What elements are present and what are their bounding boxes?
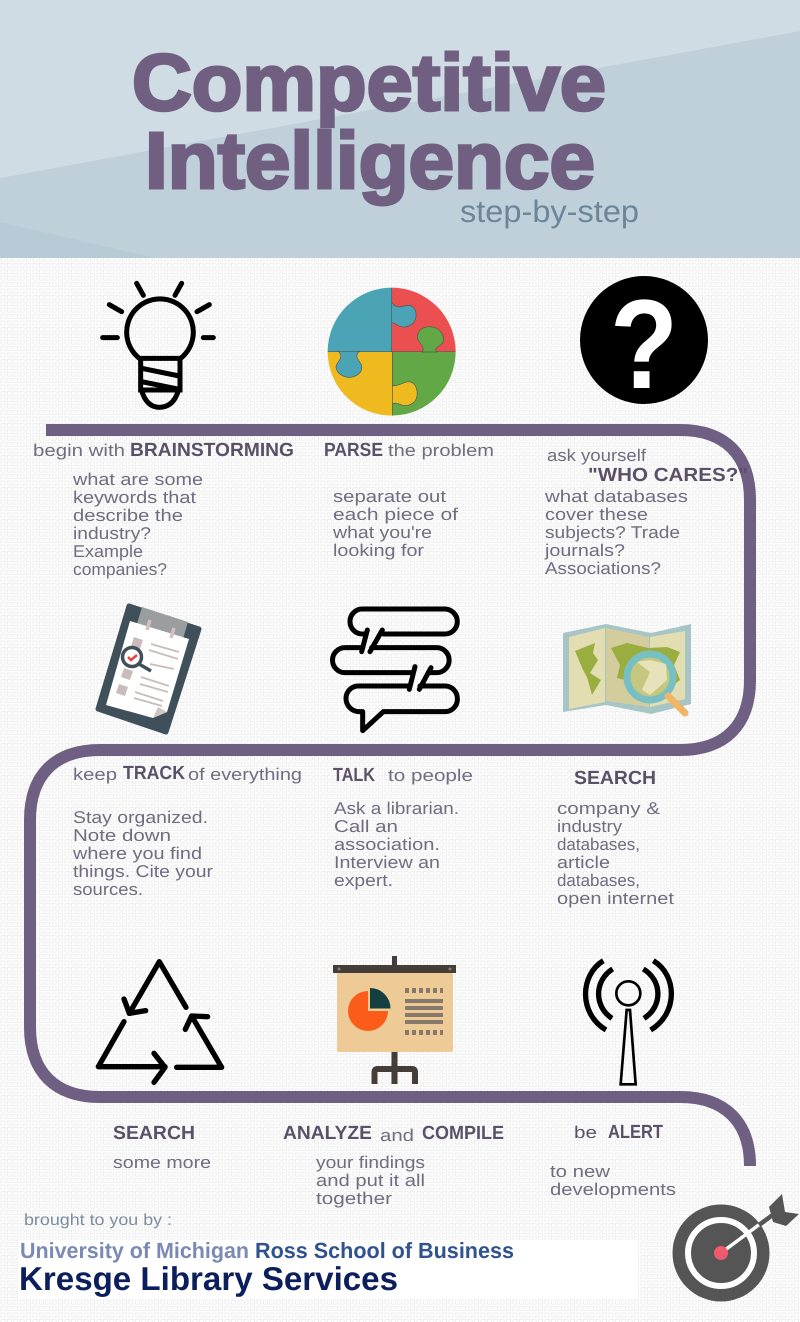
step: who cares: cover these bbox=[545, 505, 648, 524]
step: search some more: some more bbox=[113, 1153, 211, 1172]
step: search: company & bbox=[557, 799, 661, 818]
step: analyze and compile: ANALYZE bbox=[283, 1123, 372, 1144]
step: who cares bbox=[544, 446, 748, 578]
step: be alert: developments bbox=[550, 1180, 676, 1199]
step: track: Stay organized. bbox=[73, 808, 208, 827]
step: analyze and compile: COMPILE bbox=[422, 1123, 504, 1144]
step: brainstorming: industry? bbox=[73, 524, 151, 543]
step: brainstorming: keywords that bbox=[73, 488, 196, 507]
icon: clipboard bbox=[98, 606, 199, 732]
step: parse: the problem bbox=[388, 441, 494, 460]
step: search: article bbox=[557, 853, 610, 872]
icon: speech bubbles bbox=[332, 609, 457, 731]
step: track: keep bbox=[73, 765, 117, 784]
title bbox=[132, 38, 606, 205]
step: search: industry bbox=[557, 817, 623, 836]
step: track: where you find bbox=[72, 844, 202, 863]
step: analyze and compile: together bbox=[316, 1189, 392, 1208]
icon: recycle triangle bbox=[98, 962, 222, 1082]
step: search: SEARCH bbox=[574, 768, 656, 789]
logo block: University of Michigan bbox=[20, 1238, 249, 1263]
step: search bbox=[557, 768, 674, 908]
title: Competitive bbox=[132, 38, 606, 127]
step: analyze and compile: your findings bbox=[316, 1153, 425, 1172]
step: brainstorming: begin with bbox=[33, 441, 125, 460]
step: analyze and compile: and put it all bbox=[316, 1171, 425, 1190]
step: track: TRACK bbox=[123, 763, 185, 784]
step: talk: association. bbox=[334, 835, 440, 854]
step: track bbox=[72, 763, 302, 899]
icon: map with magnifier bbox=[563, 624, 691, 714]
icon: question mark bbox=[580, 273, 708, 415]
icon: antenna bbox=[586, 961, 671, 1084]
step: brainstorming: what are some bbox=[72, 470, 203, 489]
icon: puzzle bbox=[327, 287, 457, 417]
step: talk: expert. bbox=[334, 871, 393, 890]
step: brainstorming: describe the bbox=[73, 506, 183, 525]
title: Intelligence bbox=[145, 116, 595, 205]
header banner bbox=[0, 0, 800, 258]
step: be alert: ALERT bbox=[608, 1122, 663, 1143]
step: brainstorming: Example bbox=[73, 542, 143, 561]
step: search: databases, bbox=[557, 871, 640, 890]
step: track: things. Cite your bbox=[73, 862, 213, 881]
step: who cares: "WHO CARES?" bbox=[588, 465, 748, 486]
step: parse: each piece of bbox=[333, 505, 458, 524]
step: parse: what you're bbox=[332, 523, 432, 542]
step: brainstorming bbox=[33, 440, 294, 579]
icon: presentation board bbox=[333, 956, 456, 1084]
step: talk: TALK bbox=[333, 765, 375, 786]
step: parse: PARSE bbox=[324, 440, 383, 461]
step: be alert: to new bbox=[550, 1162, 611, 1181]
step: search: open internet bbox=[557, 889, 674, 908]
step: who cares: Associations? bbox=[545, 559, 661, 578]
step: analyze and compile: and bbox=[380, 1126, 414, 1145]
credit line: brought to you by : bbox=[24, 1212, 172, 1229]
step: parse: looking for bbox=[333, 541, 424, 560]
step: brainstorming: companies? bbox=[73, 560, 167, 579]
step: search some more: SEARCH bbox=[113, 1123, 195, 1144]
step: be alert bbox=[550, 1122, 676, 1199]
step: track: Note down bbox=[73, 826, 171, 845]
step: parse: separate out bbox=[333, 487, 446, 506]
icon: question mark: ? bbox=[610, 273, 678, 415]
step: talk: Ask a librarian. bbox=[334, 799, 459, 818]
step: track: of everything bbox=[188, 765, 302, 784]
step: brainstorming: BRAINSTORMING bbox=[130, 440, 294, 461]
step: talk: Interview an bbox=[334, 853, 440, 872]
step: who cares: what databases bbox=[544, 487, 688, 506]
icon: light bulb bbox=[103, 283, 213, 407]
step: talk bbox=[333, 765, 473, 890]
subtitle: step-by-step bbox=[460, 194, 639, 229]
step: talk: Call an bbox=[334, 817, 398, 836]
logo block: Kresge Library Services bbox=[19, 1260, 398, 1297]
step: be alert: be bbox=[574, 1123, 597, 1142]
step: analyze and compile bbox=[283, 1123, 504, 1208]
step: search: databases, bbox=[557, 835, 640, 854]
winding path bbox=[30, 430, 750, 1166]
step: search some more bbox=[113, 1123, 211, 1172]
step: who cares: subjects? Trade bbox=[545, 523, 680, 542]
logo block: Ross School of Business bbox=[255, 1238, 514, 1263]
icon: target with dart bbox=[672, 1194, 799, 1302]
logo block bbox=[18, 1238, 638, 1298]
step: parse bbox=[324, 440, 494, 560]
step: who cares: journals? bbox=[544, 541, 625, 560]
step: talk: to people bbox=[388, 766, 473, 785]
step: track: sources. bbox=[73, 880, 143, 899]
step: who cares: ask yourself bbox=[547, 446, 646, 465]
